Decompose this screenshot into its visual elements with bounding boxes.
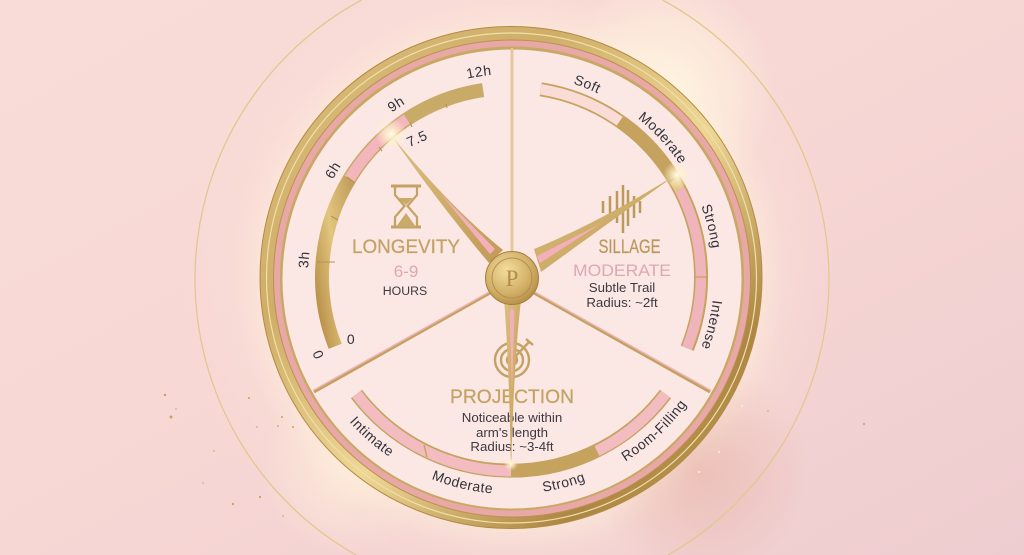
longevity scale labels [298, 65, 491, 358]
sillage scale arc [541, 89, 708, 348]
icon: hourglass [391, 186, 421, 227]
hub [486, 252, 538, 304]
dial face [282, 50, 742, 508]
projection scale labels: Strong [543, 474, 585, 492]
longevity scale labels: 3h [298, 252, 310, 268]
longevity value: 6-9 [394, 262, 418, 281]
dial [260, 26, 762, 529]
sillage value: MODERATE [573, 261, 671, 280]
longevity title: LONGEVITY [352, 237, 460, 258]
panel: projection [350, 338, 688, 494]
sillage scale labels: Moderate [638, 112, 684, 163]
panel: longevity [298, 65, 491, 358]
hub: P [506, 266, 518, 291]
longevity scale labels: 6h [326, 164, 340, 178]
projection description: Noticeable within [462, 410, 562, 425]
sillage scale labels: Intense [702, 301, 722, 348]
sillage description: Subtle Trail [589, 280, 655, 295]
longevity unit: HOURS [383, 284, 427, 298]
projection description [462, 410, 562, 454]
projection title: PROJECTION [450, 387, 574, 408]
sillage description [586, 280, 658, 310]
sillage scale labels: Soft [574, 76, 600, 94]
sector dividers [313, 48, 711, 392]
sparkles [375, 118, 691, 471]
sillage scale labels [574, 76, 722, 348]
needle: sillage [534, 174, 677, 272]
projection description: Radius: ~3-4ft [470, 439, 554, 454]
sillage description: Radius: ~2ft [586, 295, 658, 310]
panel: sillage [540, 76, 722, 351]
needles [391, 135, 677, 472]
needle: longevity [391, 135, 503, 263]
longevity scale arc [317, 90, 483, 346]
projection scale labels [350, 400, 688, 494]
longevity scale labels: 7.5 [404, 127, 430, 150]
longevity scale labels: 0 [313, 350, 323, 358]
outer thin gold orbit ring [195, 0, 829, 555]
gold dust particles [164, 394, 865, 517]
projection scale labels: Room-Filling [621, 400, 688, 461]
icon: target with arrow [495, 339, 533, 377]
sillage title: SILLAGE [598, 237, 660, 258]
projection scale labels: Intimate [350, 416, 392, 456]
longevity scale labels: 12h [467, 65, 491, 78]
longevity scale labels: 9h [388, 98, 404, 112]
longevity scale labels: 0 [347, 331, 355, 347]
projection description: arm's length [476, 425, 548, 440]
sillage scale labels: Strong [702, 204, 720, 248]
projection scale arc [356, 394, 666, 471]
projection scale labels: Moderate [432, 470, 492, 494]
dial bezel [260, 26, 762, 528]
needle: projection [504, 300, 521, 472]
icon: sound wave [603, 185, 640, 233]
